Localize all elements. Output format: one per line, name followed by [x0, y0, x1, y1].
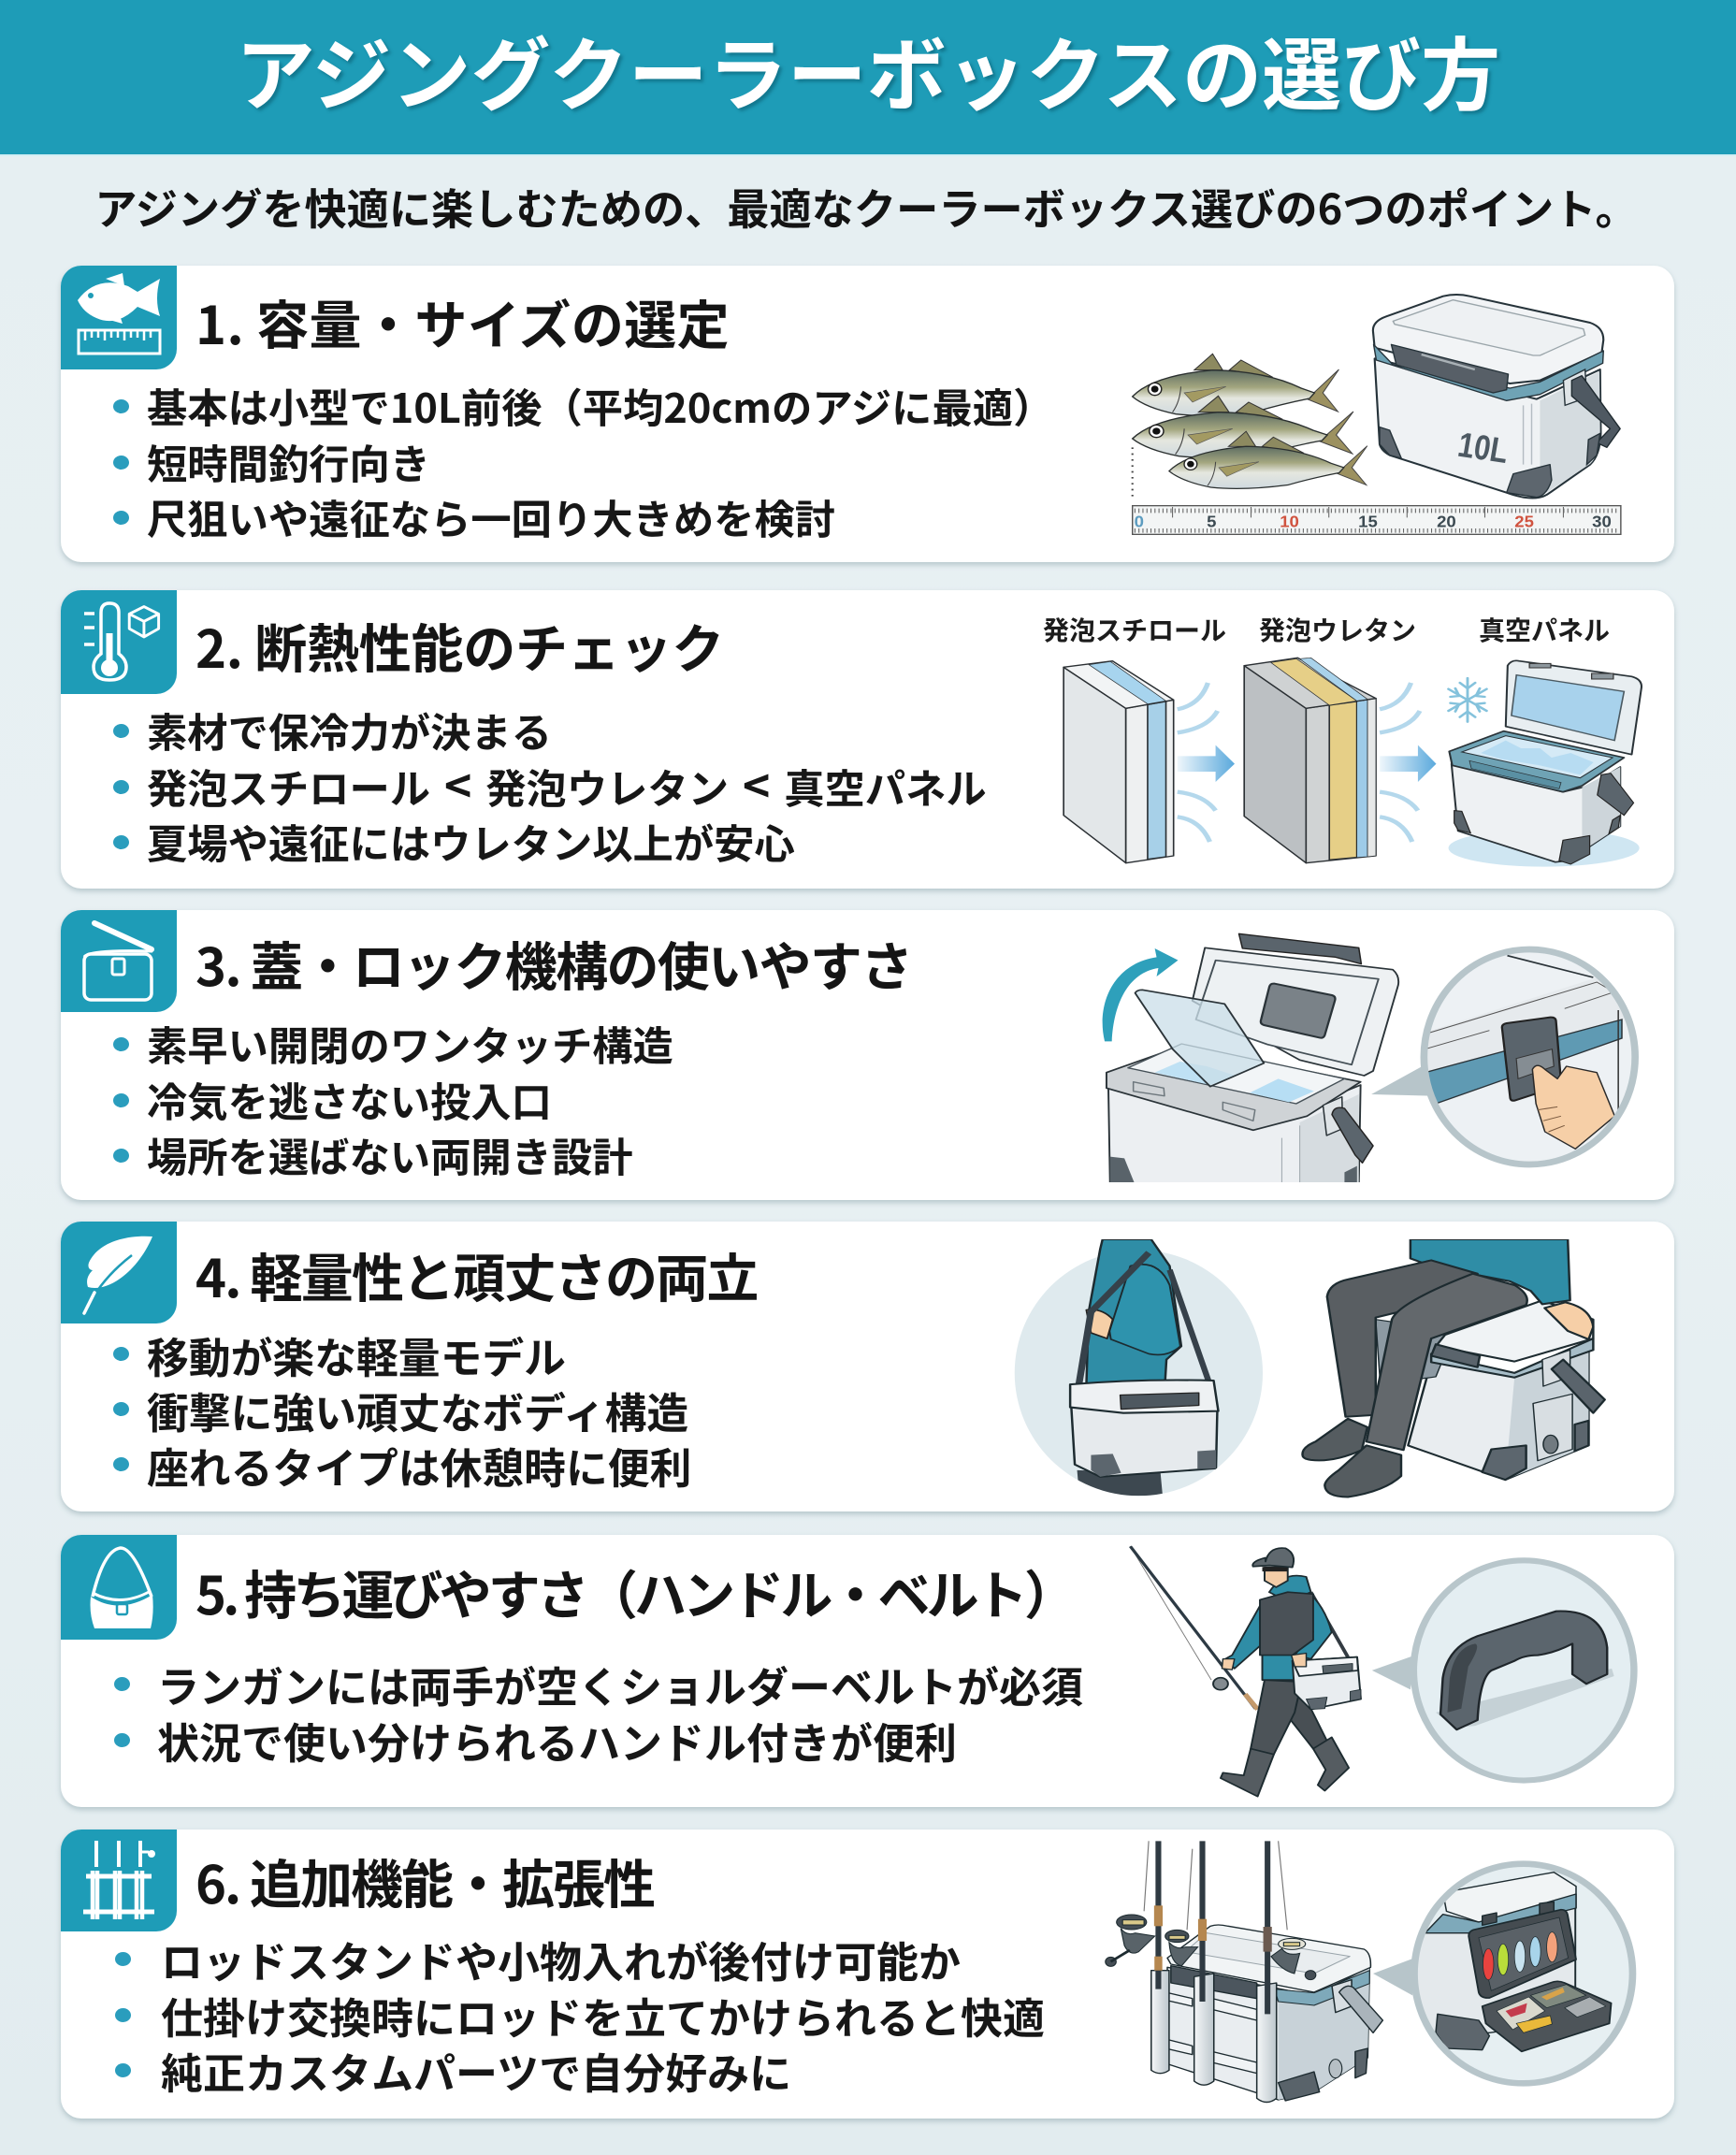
panel: 1 capacity and size: 短時間釣行向き: [147, 432, 430, 490]
header band: [0, 0, 1736, 156]
bullet list: [113, 1324, 691, 1496]
icon: fish and ruler: [61, 266, 177, 369]
illustration: open cooler and latch close-up: [1102, 933, 1639, 1182]
panel: 4 light and sturdy: 衝撃に強い頑丈なボディ構造: [147, 1380, 688, 1440]
panel: 3 lid and lock: [61, 910, 1674, 1200]
panel: 4 light and sturdy: 移動が楽な軽量モデル: [147, 1324, 566, 1385]
label: styrofoam: 発泡スチロール: [1043, 611, 1226, 648]
panel: 5 portability: 状況で使い分けられるハンドル付きが便利: [157, 1710, 957, 1770]
illustration: insulation comparison: [1063, 657, 1642, 867]
heading: 4. 軽量性と頑丈さの両立: [195, 1237, 758, 1313]
panel: 4 light and sturdy: [61, 1222, 1674, 1511]
illustration: fish, 10L cooler and ruler: 20: [1437, 513, 1456, 530]
panel: 5 portability: [61, 1535, 1674, 1807]
heading: 3. 蓋・ロック機構の使いやすさ: [195, 926, 912, 1002]
icon: open box lid: [61, 910, 177, 1012]
panel: 1 capacity and size: [61, 266, 1674, 562]
heading: 1. 容量・サイズの選定: [195, 284, 730, 360]
bullet list: [113, 701, 987, 870]
icon: rod stand: [61, 1830, 177, 1931]
panel: 3 lid and lock: 素早い開閉のワンタッチ構造: [147, 1014, 673, 1072]
panel: 1 capacity and size: 基本は小型で10L前後（平均20cmのアジに最適）: [147, 376, 1053, 434]
panel: 1 capacity and size: 尺狙いや遠征なら一回り大きめを検討: [147, 488, 835, 546]
bullet list: [113, 1014, 673, 1184]
heading: 2. 断熱性能のチェック: [195, 608, 724, 684]
illustration: fish, 10L cooler and ruler: [1132, 294, 1622, 535]
bullet list: [114, 1654, 1083, 1770]
illustration: rod holders and tackle box close-up: [1105, 1841, 1637, 2103]
panel: 3 lid and lock: 冷気を逃さない投入口: [147, 1070, 552, 1128]
panel: 6 extensions: 仕掛け交換時にロッドを立てかけられると快適: [161, 1985, 1045, 2045]
label: vacuum panel: 真空パネル: [1479, 611, 1610, 648]
panel: 6 extensions: 純正カスタムパーツで自分好みに: [161, 2039, 791, 2101]
subtitle: アジングを快適に楽しむための、最適なクーラーボックス選びの6つのポイント。: [94, 177, 1638, 238]
panel: 5 portability: ランガンには両手が空くショルダーベルトが必須: [157, 1654, 1083, 1714]
heading: 6. 追加機能・拡張性: [195, 1844, 654, 1919]
illustration: fish, 10L cooler and ruler: 5: [1207, 513, 1217, 530]
title: アジングクーラーボックスの選び方: [236, 12, 1500, 127]
panel: 2 insulation: 素材で保冷力が決まる: [147, 701, 552, 759]
panel: 2 insulation: 夏場や遠征にはウレタン以上が安心: [147, 812, 795, 870]
icon: feather: [61, 1222, 177, 1323]
illustration: fish, 10L cooler and ruler: 30: [1592, 513, 1612, 530]
panel: 4 light and sturdy: 座れるタイプは休憩時に便利: [147, 1435, 691, 1496]
panel: 6 extensions: [61, 1830, 1674, 2119]
illustration: fish, 10L cooler and ruler: 25: [1514, 513, 1534, 530]
illustration: fish, 10L cooler and ruler: 10L: [1455, 426, 1512, 471]
illustration: shoulder carry and seated on cooler: [1014, 1239, 1606, 1498]
icon: thermometer and cube: [61, 590, 177, 694]
bullet list: [113, 376, 1053, 546]
panel: 3 lid and lock: 場所を選ばない両開き設計: [147, 1126, 633, 1184]
label: urethane: 発泡ウレタン: [1259, 611, 1416, 648]
illustration: fish, 10L cooler and ruler: 0: [1135, 513, 1144, 530]
illustration: angler walking and handle close-up: [1129, 1545, 1638, 1798]
icon: shoulder bag: [61, 1535, 177, 1640]
panel: 2 insulation: [61, 590, 1674, 889]
panel: 2 insulation: 発泡スチロール < 発泡ウレタン < 真空パネル: [147, 750, 987, 817]
bullet list: [115, 1929, 1045, 2101]
illustration: fish, 10L cooler and ruler: 10: [1280, 513, 1299, 530]
illustration: fish, 10L cooler and ruler: 15: [1358, 513, 1378, 530]
panel: 6 extensions: ロッドスタンドや小物入れが後付け可能か: [161, 1929, 961, 1989]
heading: 5. 持ち運びやすさ（ハンドル・ベルト）: [195, 1555, 1073, 1630]
